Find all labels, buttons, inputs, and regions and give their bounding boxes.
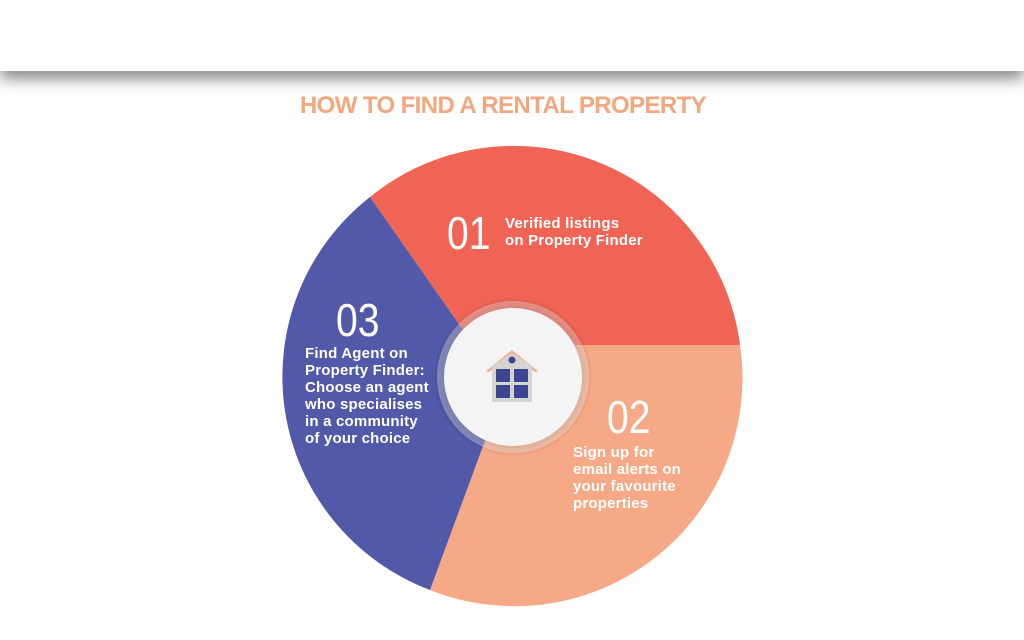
number 01: 01: [447, 207, 490, 259]
segment: red 01: [370, 146, 740, 376]
text 01: [505, 215, 643, 249]
step 02: [573, 391, 681, 512]
segment: blue 03: [282, 197, 512, 590]
text 02: email alerts on: [573, 461, 681, 478]
text 03: Find Agent on: [305, 345, 408, 362]
text 03: in a community: [305, 413, 418, 430]
header shadow band: [0, 0, 1024, 71]
text 01: on Property Finder: [505, 232, 643, 249]
text 03: of your choice: [305, 430, 410, 447]
step 01: [447, 207, 643, 259]
icon: house: [486, 350, 538, 402]
text 03: [305, 345, 429, 447]
text 01: Verified listings: [505, 215, 619, 232]
title: HOW TO FIND A RENTAL PROPERTY: [300, 92, 706, 119]
step 03: [305, 294, 429, 447]
center ring: [433, 297, 593, 457]
text 02: your favourite: [573, 478, 676, 495]
segment: orange 02: [430, 345, 742, 606]
text 02: Sign up for: [573, 444, 654, 461]
text 03: Choose an agent: [305, 379, 429, 396]
number 03: 03: [336, 294, 379, 346]
number 02: 02: [607, 391, 650, 443]
text 03: Property Finder:: [305, 362, 425, 379]
text 02: properties: [573, 495, 648, 512]
text 03: who specialises: [305, 396, 422, 413]
text 02: [573, 444, 681, 512]
